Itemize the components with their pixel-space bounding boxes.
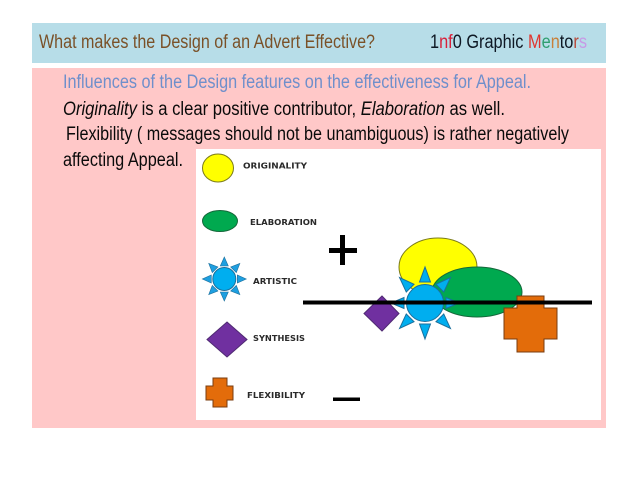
brand name: 1nf0 Graphic Mentors bbox=[430, 32, 587, 53]
legend: originality bbox=[202, 154, 308, 182]
title: What makes the Design of an Advert Effective? bbox=[39, 32, 375, 53]
text: flexibility line two: affecting Appeal. bbox=[63, 150, 183, 171]
legend: elaboration: ELABORATION bbox=[250, 218, 317, 227]
axis line bbox=[303, 300, 592, 304]
chart shape: flexibility bbox=[504, 296, 557, 352]
chart shape: synthesis bbox=[364, 296, 399, 331]
legend: flexibility bbox=[206, 378, 306, 407]
header band bbox=[32, 23, 606, 63]
subheading: Influences of the Design features on the effectiveness for Appeal. bbox=[63, 72, 531, 93]
chart shape: originality bbox=[399, 238, 477, 296]
legend: synthesis: SYNTHESIS bbox=[253, 334, 305, 343]
chart shape: artistic bbox=[391, 267, 459, 339]
legend: synthesis bbox=[207, 322, 305, 357]
legend: elaboration bbox=[202, 210, 317, 232]
minus sign bbox=[333, 398, 360, 401]
legend: artistic bbox=[202, 257, 298, 301]
text: originality: Originality is a clear positive contributor, Elaboration as well. bbox=[63, 99, 505, 120]
panel: content bbox=[32, 68, 606, 428]
legend: artistic: ARTISTIC bbox=[253, 277, 298, 286]
chart shape: elaboration bbox=[432, 267, 522, 317]
panel: chart bbox=[196, 149, 601, 420]
legend: originality: ORIGINALITY bbox=[243, 162, 308, 170]
legend: flexibility: FLEXIBILITY bbox=[247, 391, 306, 400]
plus sign bbox=[329, 235, 357, 265]
